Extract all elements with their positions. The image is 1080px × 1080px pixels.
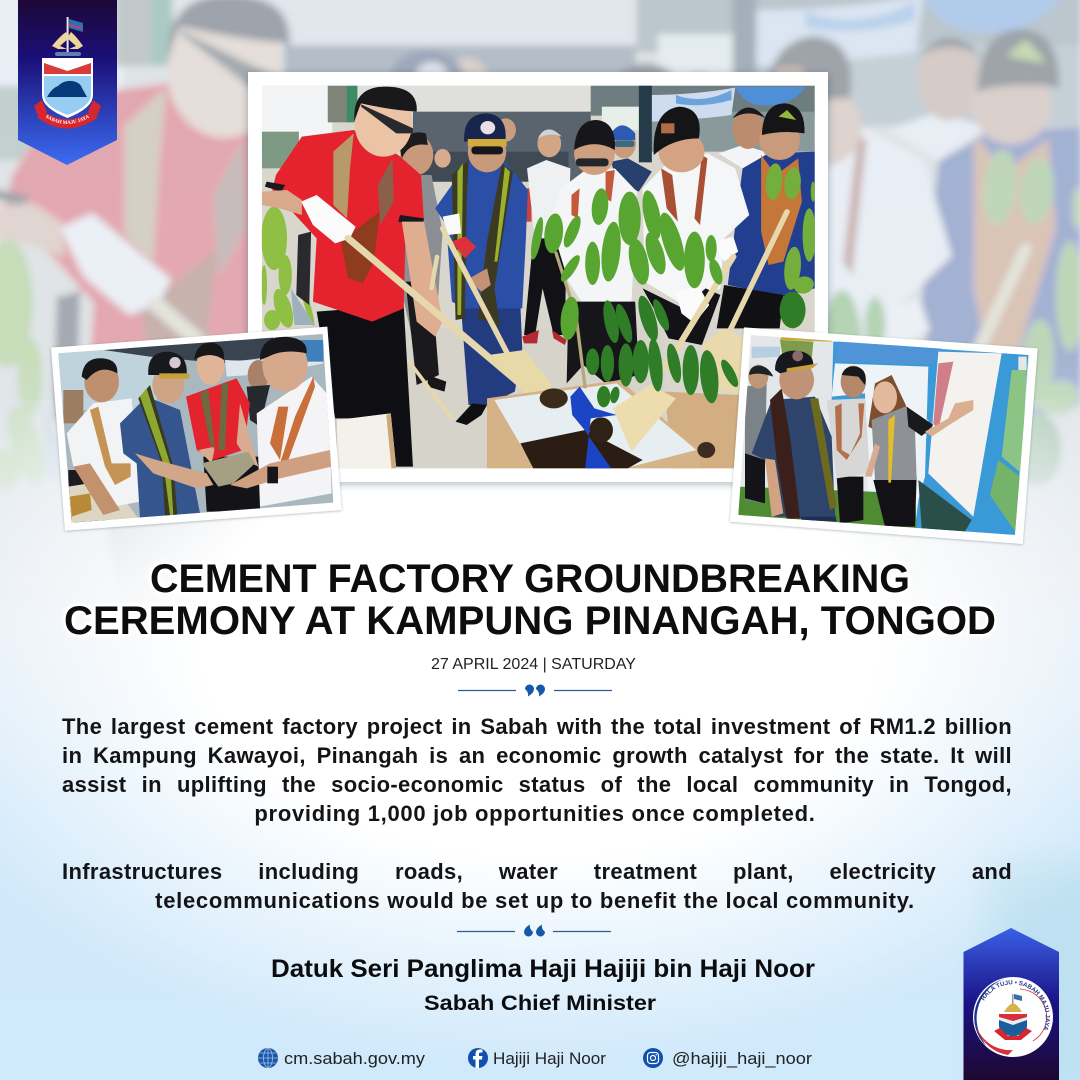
icon: instagram — [643, 1048, 663, 1068]
footer: website — [258, 1048, 426, 1068]
icon: round emblem — [973, 977, 1053, 1057]
opening quote divider — [458, 684, 612, 696]
icon: Sabah state crest: SABAH MAJU JAYA — [46, 114, 90, 124]
body paragraph two: telecommunications would be set up to benefit the local community. — [155, 888, 915, 913]
title — [64, 557, 996, 643]
footer: website: cm.sabah.gov.my — [284, 1050, 426, 1068]
closing quote divider — [457, 924, 611, 936]
icon: globe — [258, 1048, 278, 1068]
body paragraph one: providing 1,000 job opportunities once completed. — [254, 801, 816, 826]
body paragraph two — [62, 859, 1012, 913]
icon: Sabah state crest — [34, 17, 101, 129]
main photo with white frame — [248, 72, 828, 482]
background: white glow behind the text area — [0, 400, 1080, 1080]
name of the speaker: Datuk Seri Panglima Haji Hajiji bin Haji Noor — [271, 955, 815, 983]
speaker position: Sabah Chief Minister — [424, 991, 657, 1015]
title: CEREMONY AT KAMPUNG PINANGAH, TONGOD — [64, 599, 996, 643]
date: 27 APRIL 2024 | SATURDAY — [431, 656, 636, 673]
right photo: leaders viewing a project board — [730, 327, 1038, 544]
footer: instagram: @hajiji_haji_noor — [672, 1050, 813, 1068]
background: enlarged faded photo — [0, 0, 1080, 544]
title: CEMENT FACTORY GROUNDBREAKING — [150, 557, 910, 601]
footer: facebook: Hajiji Haji Noor — [493, 1050, 607, 1068]
body paragraph one: assist in uplifting the socio-economic status of the local community in Tongod, — [62, 772, 1012, 797]
body paragraph one: The largest cement factory project in Sabah with the total investment of RM1.2 billion — [62, 714, 1012, 739]
icon: facebook — [468, 1048, 488, 1068]
footer: instagram — [643, 1048, 813, 1068]
body paragraph two: Infrastructures including roads, water treatment plant, electricity and — [62, 859, 1012, 884]
left photo: leaders holding a rock sample — [51, 327, 342, 531]
icon: round emblem: HALA TUJU • SABAH MAJU JAYA — [981, 980, 1050, 1030]
body paragraph one — [62, 714, 1012, 826]
body paragraph one: in Kampung Kawayoi, Pinangah is an economic growth catalyst for the state. It will — [62, 743, 1012, 768]
top-left banner with state crest — [18, 0, 117, 165]
bottom-right banner with round emblem — [964, 928, 1059, 1080]
